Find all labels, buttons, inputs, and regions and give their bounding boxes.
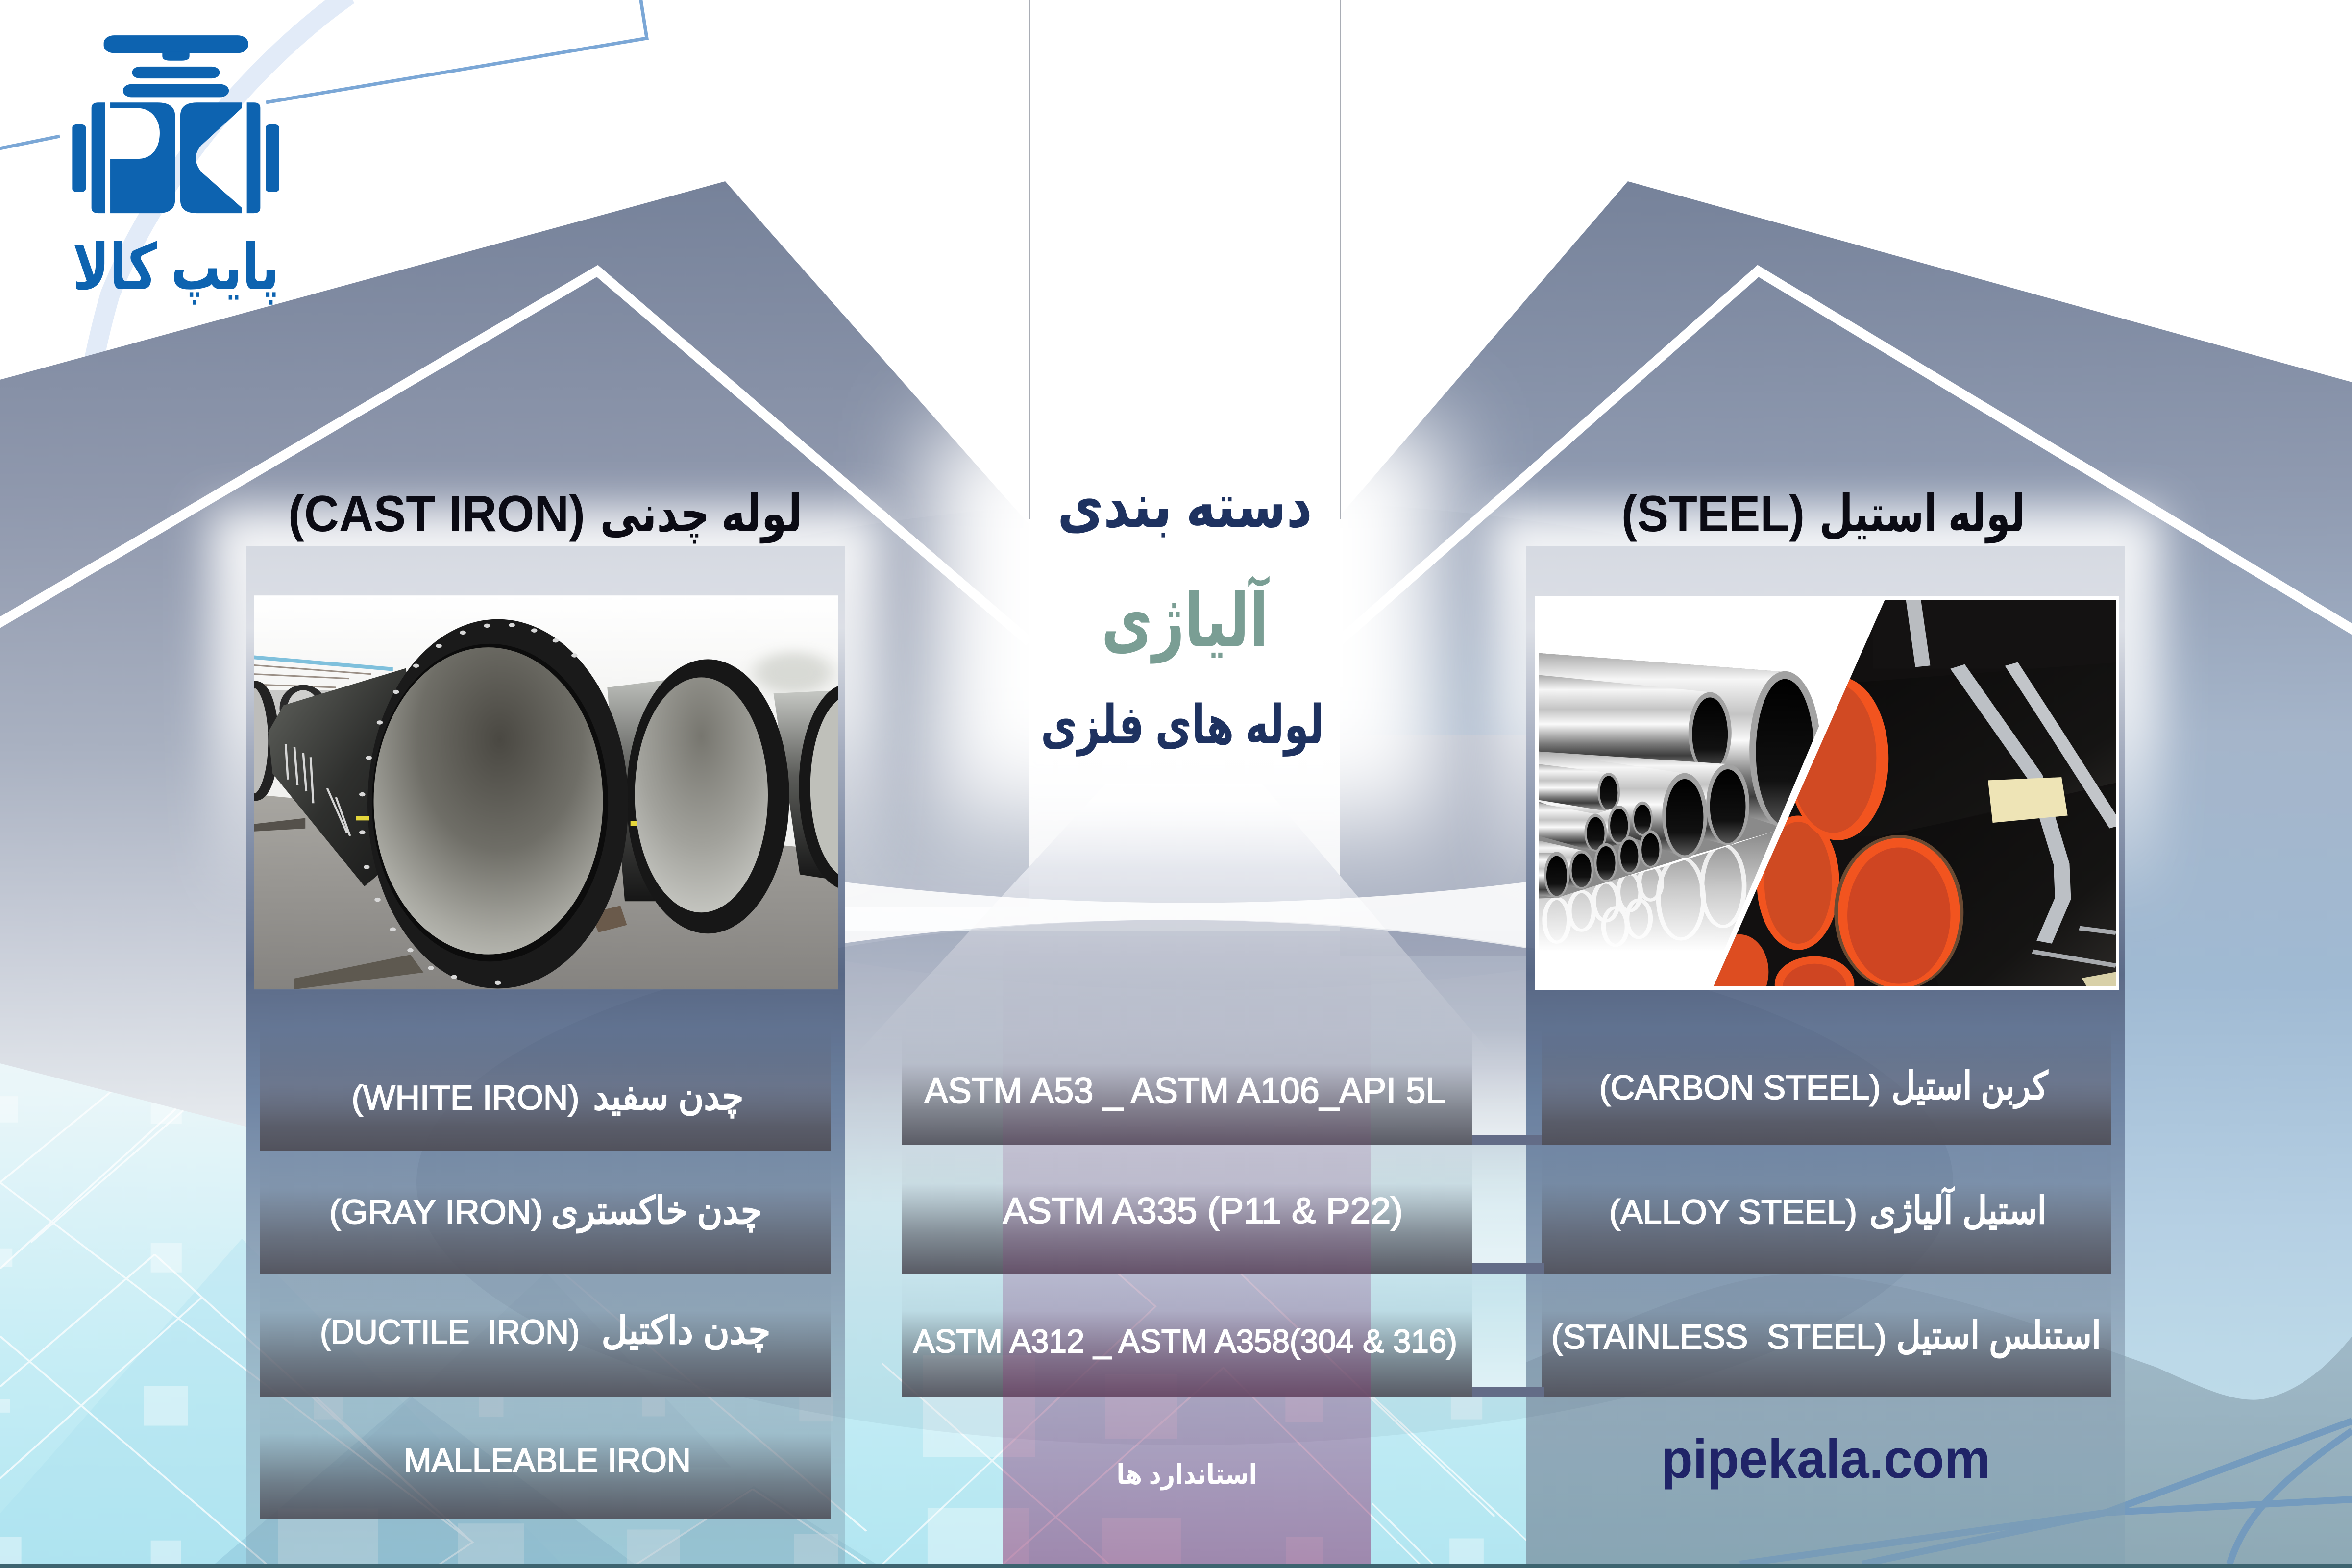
heading: steel: لوله استیل [1819,486,2025,543]
label: ductile iron: چدن داکتیل [602,1309,770,1352]
item bar: stainless steel [1542,1274,2111,1396]
heading: steel [1621,486,2025,543]
label: gray iron: چدن خاکستری [551,1189,762,1233]
photo: cast iron pipes [254,595,838,990]
label: white iron: (WHITE IRON) [352,1078,579,1117]
standard bar: a53 [902,1029,1472,1145]
left panel glow [211,510,882,911]
label: malleable iron: MALLEABLE IRON [404,1441,691,1479]
heading: cast iron: لوله چدنی [600,486,803,544]
background pattern: centre [882,1274,1539,1565]
item bar: alloy steel [1542,1145,2111,1274]
light beam [848,784,1499,1063]
photo: steel pipes [1535,596,2122,1012]
decorative arc [2,0,349,1063]
column rule right [1340,0,1341,519]
logo [72,35,279,305]
heading: cast iron [288,486,803,544]
standard: a312: ASTM A312 _ ASTM A358(304 & 316) [913,1323,1457,1360]
item bar: ductile iron [260,1274,831,1396]
title line 2: آلیاژی [1102,576,1270,664]
roof line left [0,271,1029,642]
left house shape [0,181,1029,1142]
background crossing lines [1740,1421,2352,1564]
panel: steel [1526,546,2125,1564]
standards column [1003,931,1371,1564]
label: alloy steel [1609,1187,2047,1233]
standard bar: a335 [902,1145,1472,1274]
label: alloy steel: استیل آلیاژی [1869,1187,2047,1233]
white glow behind centre [931,421,1441,872]
right gap tint [1340,735,1526,956]
heading: cast iron: (CAST IRON) [288,486,585,542]
curved band white [844,882,1526,948]
lower dome [844,931,1526,1205]
label: gray iron [329,1189,762,1233]
label: stainless steel: استنلس استیل [1896,1314,2101,1358]
logo mark [72,35,279,213]
label: carbon steel: کربن استیل [1891,1064,2048,1109]
standard: a53: ASTM A53 _ ASTM A106_API 5L [924,1070,1446,1111]
central white column upper [1029,0,1340,735]
column rule left [1029,0,1030,519]
logo wordmark: پایپ کالا [73,231,279,305]
central white column [1029,735,1340,833]
label: carbon steel: (CARBON STEEL) [1599,1068,1881,1106]
bottom strip [0,1564,2352,1568]
website: pipekala.com [1661,1428,1990,1490]
label: stainless steel [1551,1314,2101,1358]
title line 1: دسته بندی [1057,472,1312,540]
label: ductile iron: (DUCTILE IRON) [320,1313,580,1351]
standard bar: a312 [902,1274,1472,1396]
soft ellipse upper [429,500,1997,990]
background wave [1526,1274,2352,1564]
label: ductile iron [320,1309,770,1352]
connectors [1472,1135,1544,1397]
standards label: استاندارد ها [1116,1459,1257,1491]
label: gray iron: (GRAY IRON) [329,1193,543,1231]
label: stainless steel: (STAINLESS STEEL) [1551,1318,1886,1356]
item bar: gray iron [260,1151,831,1274]
heading: steel: (STEEL) [1621,486,1805,542]
lower background gradient [0,882,2352,1564]
right house shape [1340,181,2352,1564]
label: white iron: چدن سفید [593,1075,744,1118]
panel: cast iron [246,546,845,1564]
background geometric pattern [0,980,878,1565]
item bar: carbon steel [1542,1029,2111,1145]
central title [1041,472,1324,757]
item bar: white iron [260,1029,831,1151]
decorative frame line left [0,136,60,148]
label: carbon steel [1599,1064,2048,1109]
standard: a335: ASTM A335 (P11 & P22) [1003,1190,1403,1231]
label: white iron [352,1075,744,1118]
decorative frame line [266,0,647,102]
right panel glow [1490,510,2161,911]
title line 3: لوله های فلزی [1041,695,1324,757]
label: alloy steel: (ALLOY STEEL) [1609,1193,1857,1231]
soft ellipse lower [416,920,1953,1445]
roof line right [1340,271,2352,640]
connector gaps [1472,1029,1526,1387]
item bar: malleable iron [260,1396,831,1519]
